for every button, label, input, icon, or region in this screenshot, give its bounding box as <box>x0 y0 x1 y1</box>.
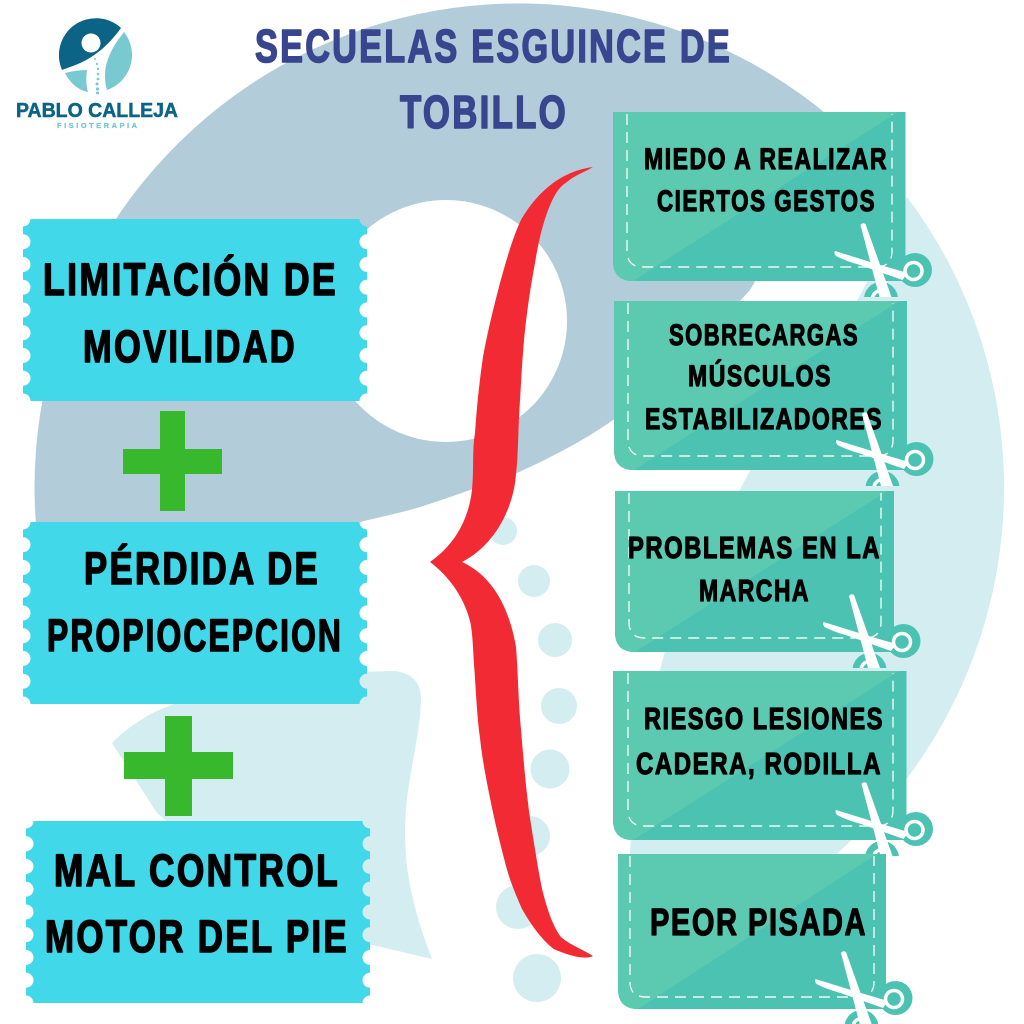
logo name: PABLO CALLEJA <box>16 100 178 122</box>
card: riesgo lesiones cadera, rodilla <box>613 671 933 875</box>
icon: plus 2 <box>124 716 233 816</box>
card: miedo a realizar ciertos gestos: MIEDO A REALIZAR <box>644 143 888 176</box>
card: miedo a realizar ciertos gestos <box>613 112 932 316</box>
background: light logo lower-left shape <box>112 671 432 959</box>
card: sobrecargas músculos estabilizadores: SOBRECARGAS <box>669 319 859 352</box>
card: miedo a realizar ciertos gestos: CIERTOS GESTOS <box>657 185 876 218</box>
panel: mal control motor del pie: MOTOR DEL PIE <box>45 911 349 962</box>
logo: Pablo Calleja <box>16 18 178 130</box>
icon: scissors <box>835 782 933 875</box>
panel: limitación de movilidad: LIMITACIÓN DE <box>43 254 338 305</box>
panel: mal control motor del pie <box>26 821 370 1003</box>
card: sobrecargas músculos estabilizadores <box>614 301 934 505</box>
logo subtitle: FISIOTERAPIA <box>57 121 138 130</box>
icon: scissors <box>834 223 932 316</box>
card: sobrecargas músculos estabilizadores: ESTABILIZADORES <box>645 403 883 436</box>
background: dark logo shape <box>35 3 830 600</box>
card: peor pisada <box>618 854 912 1024</box>
panel: limitación de movilidad <box>23 219 367 401</box>
card: riesgo lesiones cadera, rodilla: RIESGO LESIONES <box>644 701 884 736</box>
card: problemas en la marcha: MARCHA <box>699 573 810 608</box>
panel: pérdida de propiocepción: PÉRDIDA DE <box>84 543 320 594</box>
icon: plus 1 <box>123 411 222 511</box>
title: TOBILLO <box>400 86 568 138</box>
panel: pérdida de propiocepción: PROPIOCEPCION <box>47 610 343 661</box>
title: SECUELAS ESGUINCE DE <box>255 20 732 72</box>
card: problemas en la marcha <box>615 491 920 687</box>
panel: limitación de movilidad: MOVILIDAD <box>83 321 297 372</box>
panel: pérdida de propiocepción <box>23 522 367 704</box>
card: sobrecargas músculos estabilizadores: MÚSCULOS <box>688 359 832 393</box>
icon: scissors <box>823 594 920 687</box>
logo mark <box>59 18 132 95</box>
card: problemas en la marcha: PROBLEMAS EN LA <box>628 530 881 565</box>
icon: scissors <box>815 951 912 1024</box>
title <box>255 20 732 138</box>
card: riesgo lesiones cadera, rodilla: CADERA, RODILLA <box>636 746 882 781</box>
red curly brace <box>430 167 593 958</box>
card: peor pisada: PEOR PISADA <box>650 902 867 944</box>
background: light logo right shape <box>625 197 1004 937</box>
icon: scissors <box>836 412 934 505</box>
panel: mal control motor del pie: MAL CONTROL <box>54 845 340 896</box>
background: spine dots <box>489 517 577 1002</box>
